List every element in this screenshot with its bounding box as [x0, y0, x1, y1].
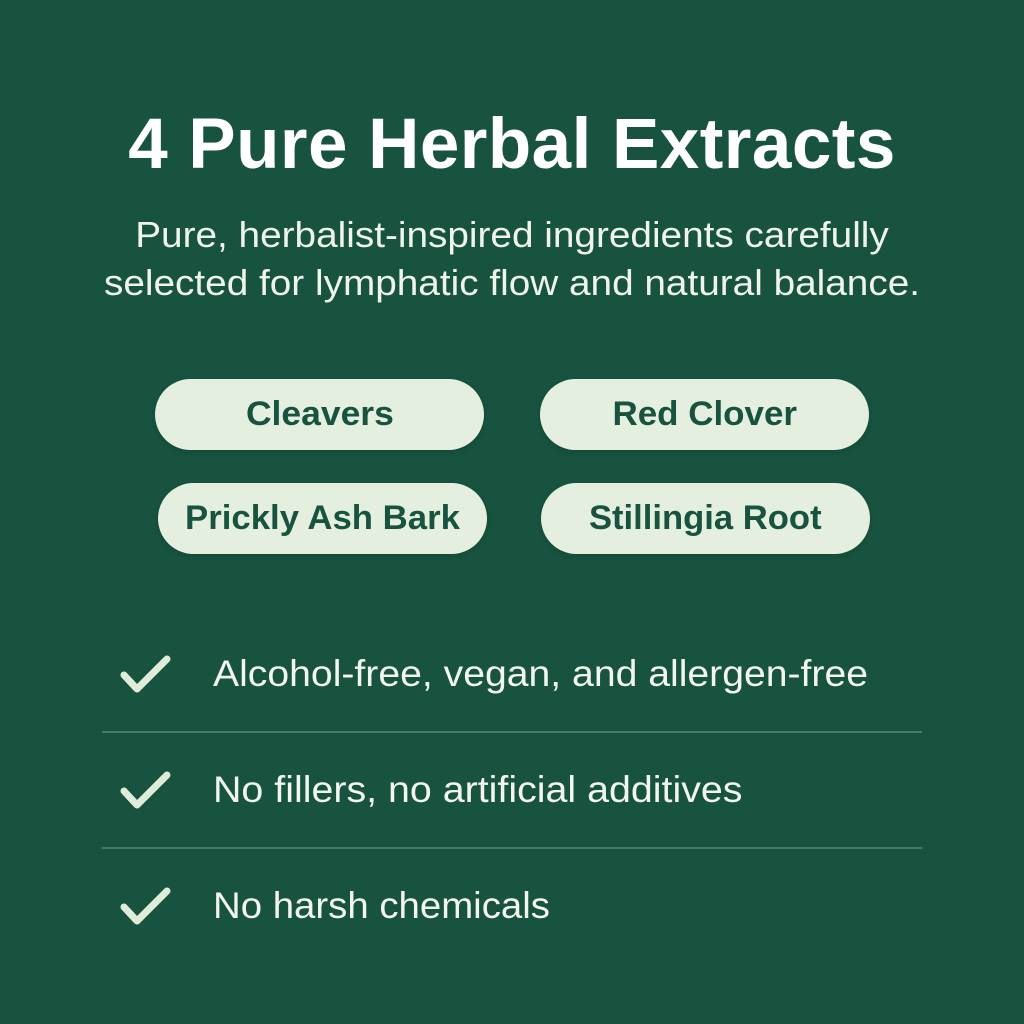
pill: Prickly Ash Bark [158, 483, 487, 554]
pill: Stillingia Root: Stillingia Root [589, 499, 822, 537]
icon: check mark [120, 888, 170, 924]
pill: Cleavers [155, 379, 484, 450]
pill: Red Clover [540, 379, 869, 450]
benefit: no harsh chemicals [120, 885, 550, 926]
subtitle text: Pure, herbalist-inspired ingredients carefully [135, 214, 889, 255]
benefit: no fillers [120, 769, 742, 810]
ingredient pills [155, 379, 870, 554]
benefit: alcohol-free [120, 653, 868, 694]
icon: check mark [120, 772, 170, 808]
pill: Prickly Ash Bark: Prickly Ash Bark [185, 499, 460, 537]
benefit text: Alcohol-free, vegan, and allergen-free [213, 653, 868, 694]
benefit text: No fillers, no artificial additives [213, 769, 742, 810]
subtitle text: selected for lymphatic flow and natural balance. [104, 262, 920, 303]
benefit text: No harsh chemicals [213, 885, 550, 926]
subtitle text [104, 214, 920, 303]
title: 4 Pure Herbal Extracts [128, 105, 896, 184]
pill: Red Clover: Red Clover [612, 395, 797, 433]
pill: Cleavers: Cleavers [246, 395, 393, 433]
pill: Stillingia Root [541, 483, 870, 554]
icon: check mark [120, 656, 170, 692]
